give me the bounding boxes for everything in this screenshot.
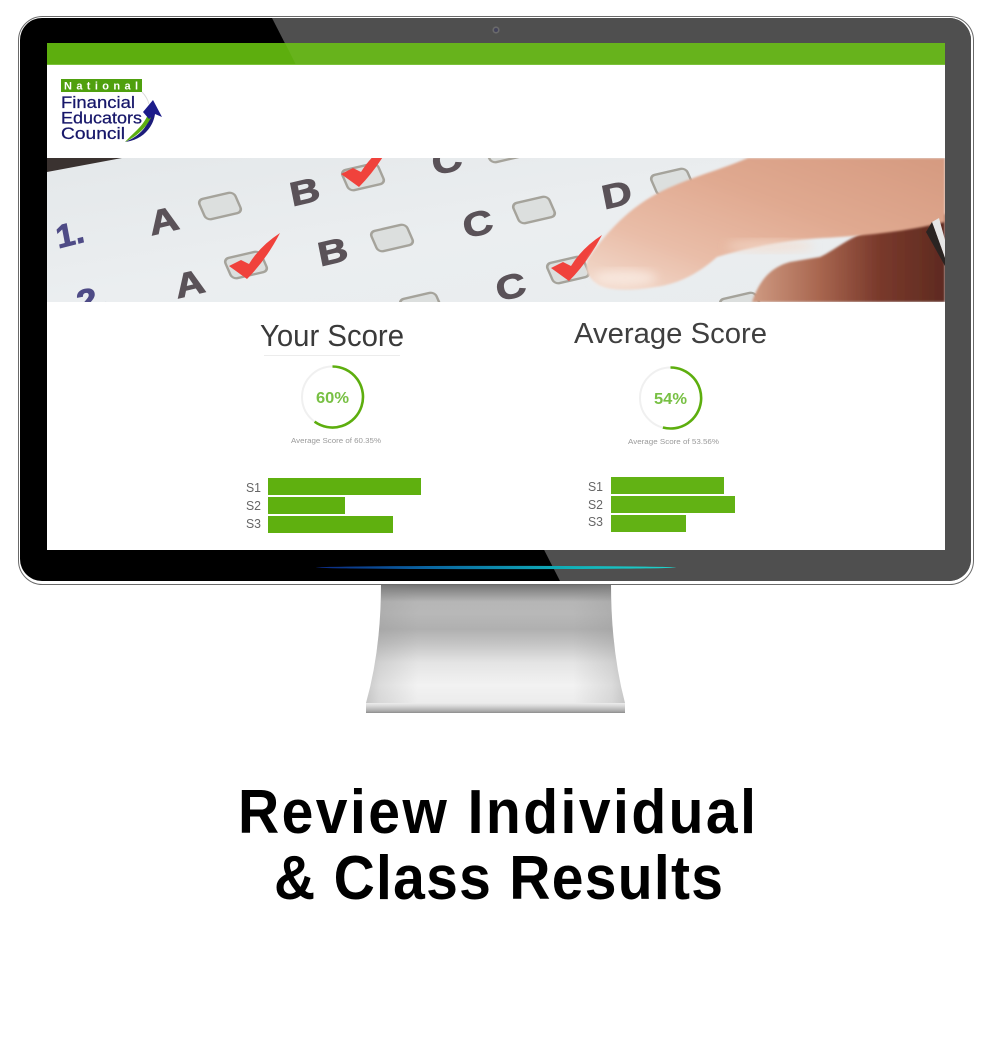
answer sheet letters: C bbox=[429, 140, 465, 183]
panel: your score bbox=[246, 318, 421, 533]
answer sheet check boxes bbox=[198, 158, 760, 302]
answer sheet letters: D bbox=[599, 174, 635, 217]
bar chart: your score sections: S2 bbox=[246, 498, 261, 513]
logo: National Financial Educators Council: National bbox=[64, 80, 138, 92]
answer sheet letters: 2. bbox=[74, 279, 110, 321]
icon: webcam bbox=[492, 26, 500, 34]
answer sheet letters bbox=[56, 158, 630, 302]
progress ring: 54%: 54% bbox=[654, 391, 687, 408]
bar chart: your score sections bbox=[246, 478, 421, 533]
banner photo: answer sheet and finger bbox=[47, 158, 945, 302]
monitor bezel bbox=[18, 16, 974, 584]
logo: National Financial Educators Council: Council bbox=[61, 125, 125, 143]
logo: National Financial Educators Council: Educators bbox=[61, 110, 142, 128]
heading: your score: Your Score bbox=[260, 318, 404, 353]
bar chart: average score sections: S2 bbox=[588, 497, 603, 512]
caption: average score 53.56%: Average Score of 53.56% bbox=[628, 439, 719, 446]
bar chart: average score sections bbox=[588, 477, 735, 532]
bar chart: your score sections: S3 bbox=[246, 516, 261, 531]
progress ring: 54% bbox=[640, 367, 701, 428]
title: review individual and class results: & Class Results bbox=[274, 843, 723, 913]
progress ring: 60%: 60% bbox=[316, 390, 349, 407]
answer sheet letters: B bbox=[287, 171, 323, 214]
title: review individual and class results bbox=[238, 777, 756, 913]
progress ring: 60% bbox=[302, 366, 363, 428]
screen LED strip bbox=[316, 566, 676, 569]
finger bbox=[586, 158, 945, 302]
bar chart: average score sections: S3 bbox=[588, 514, 603, 529]
answer sheet letters: 1. bbox=[53, 214, 87, 256]
bar chart: average score sections: S1 bbox=[588, 479, 603, 494]
red check marks bbox=[229, 158, 602, 281]
bar chart: your score sections: S1 bbox=[246, 480, 261, 495]
monitor stand bbox=[366, 584, 625, 713]
logo: National Financial Educators Council: Financial bbox=[61, 94, 135, 112]
caption: average score 60.35%: Average Score of 60.35% bbox=[291, 438, 381, 445]
answer sheet letters: A bbox=[172, 263, 208, 306]
answer sheet letters: C bbox=[493, 266, 529, 309]
title: review individual and class results: Review Individual bbox=[238, 777, 756, 847]
logo: National Financial Educators Council bbox=[61, 79, 162, 143]
answer sheet letters: A bbox=[146, 200, 182, 243]
answer sheet letters: B bbox=[315, 231, 351, 274]
screen bbox=[47, 43, 945, 550]
answer sheet letters: C bbox=[460, 203, 496, 246]
heading: average score: Average Score bbox=[574, 318, 767, 350]
panel: average score bbox=[574, 318, 767, 532]
green header bar bbox=[47, 43, 945, 65]
